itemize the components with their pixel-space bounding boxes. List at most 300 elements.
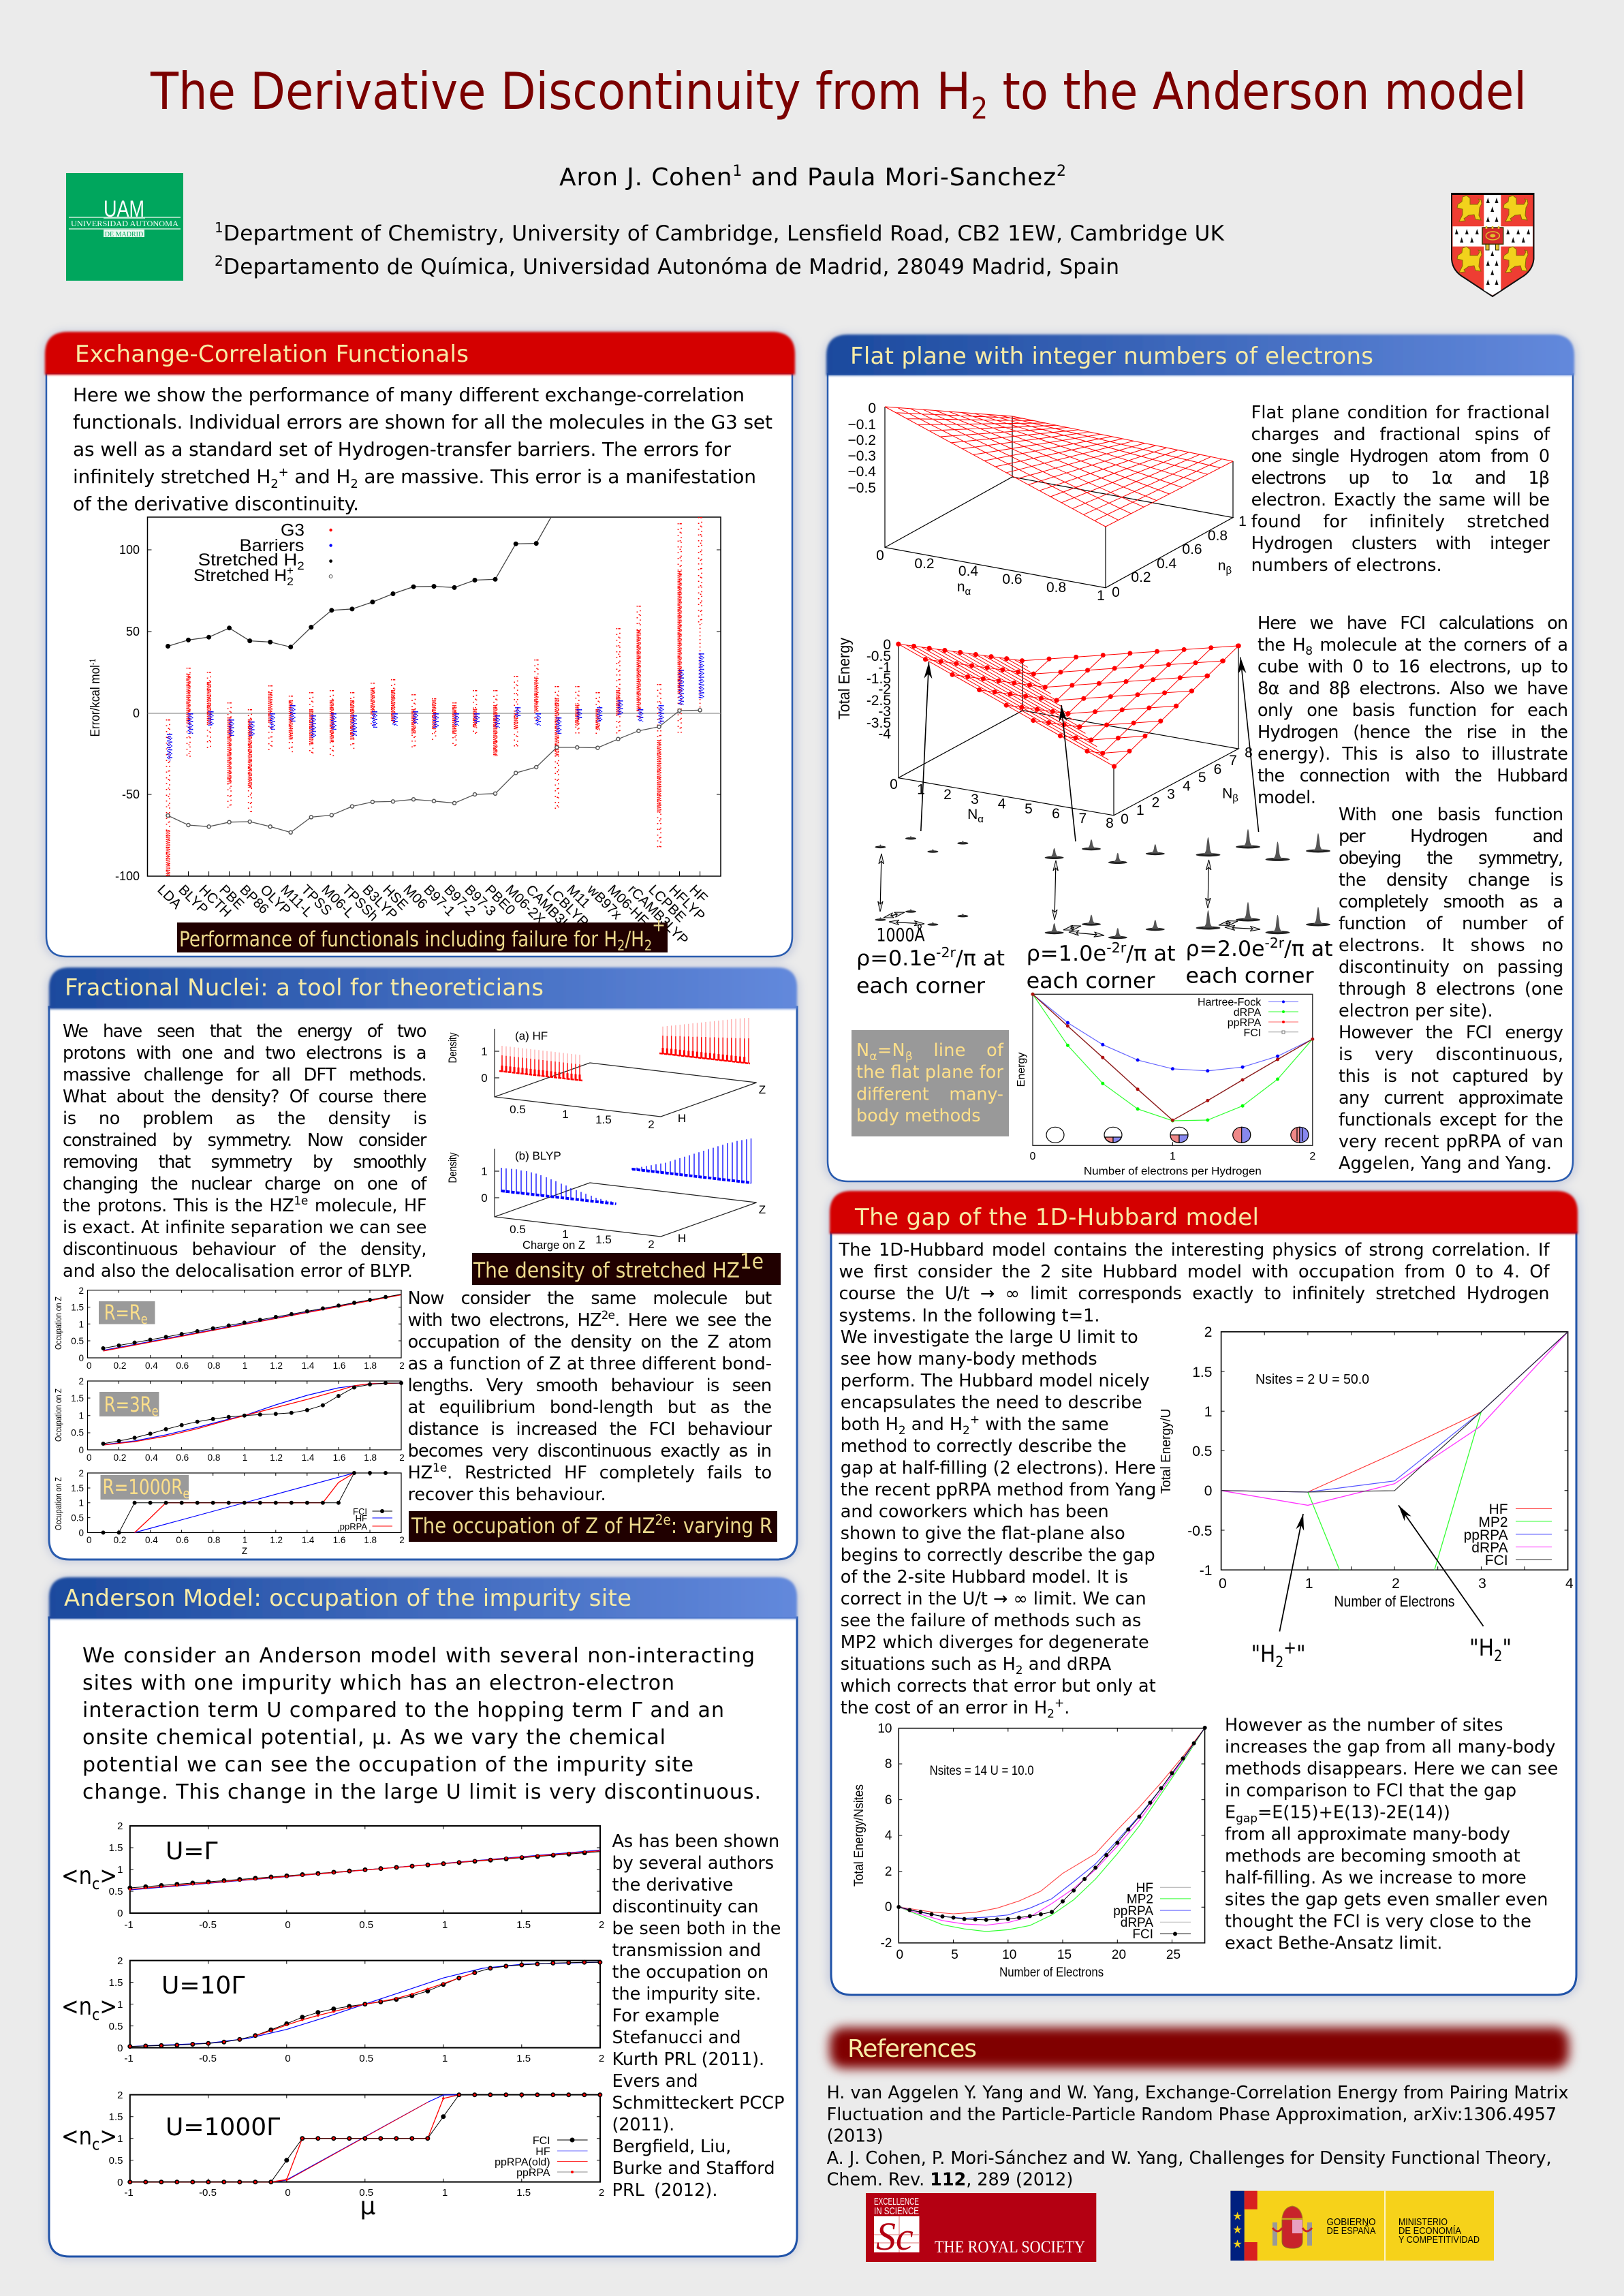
chart: H8 FCI energy plane: 2 [943,787,952,803]
chart: nalpha=nbeta energy curves: 2 [1309,1151,1315,1162]
blue barrier error points [168,653,704,760]
text block: two electrons HZ2e: . Restricted HF completely fails to [447,1463,772,1483]
chart: occupation R=3Re: 0.2 [114,1453,126,1463]
chart: flat plane for one hydrogen: β [1226,565,1232,576]
title: 2 [971,91,988,126]
callout: Na=Nb line: β [905,1050,913,1064]
legend: Nsites=14 chart: MP2 [1127,1893,1153,1906]
chart: occupation R=3Re: 1.4 [302,1453,315,1463]
chart: occupation R=3Re: 1 [243,1453,247,1463]
text block: FCI calculations on H8: the H [1258,635,1306,655]
text block: derivative discontinuity references: Schmitteckert PCCP [612,2093,785,2113]
panel: References [827,2028,1569,2190]
text block: derivative discontinuity references: As has been shown [612,1831,779,1852]
text block: introduction: functionals. Individual errors are shown for all the molecules in the G3 set [73,411,772,433]
text block: FCI calculations on H8: cube with 0 to 16 electrons, up to [1258,657,1568,677]
legend: Nsites=14 chart [1113,1881,1191,1942]
text block: FCI calculations on H8: energy). This is also to illustrate [1258,744,1568,764]
logo: Universidad Autonoma de Madrid: UNIVERSIDAD AUTONOMA [71,219,178,228]
affiliations: Department of Chemistry, University of Cambridge, Lensfield Road, CB2 1EW, Cambridge UK [223,221,1225,246]
diagram: density peaks rho=0.1: 1000Å [876,925,925,946]
chart: U=Gamma: <n [61,1862,97,1890]
chart: occupation R=Re: 0.5 [71,1336,84,1346]
text block: energy and density of two protons: discontinuous behaviour of the density, [63,1239,426,1260]
legend: methods: FCI [1244,1027,1261,1039]
text block: Anderson introduction: potential we can see the occupation of the impurity site [82,1753,693,1777]
chart: occupation R=Re: 0 [87,1361,91,1371]
heading: References [830,2028,1569,2068]
text block: one basis function per hydrogen: functionals except for the [1339,1110,1563,1130]
label: H2+: " [1296,1641,1306,1668]
chart: density BLYP: 0.5 [510,1223,526,1236]
diagram: density peaks rho=0.1 [875,836,968,946]
chart: U=10 Gamma [61,1955,604,2064]
chart legend: 2 [297,559,304,572]
logo: The Royal Society: EXCELLENCE [874,2196,919,2207]
text block: flat plane condition: one single Hydrogen atom from 0 [1251,446,1550,467]
chart: Nsites=2 total energy: 2 [1204,1324,1212,1340]
chart: H8 FCI energy plane: 5 [1025,801,1033,817]
x axis functional names: PBE [216,882,247,913]
text block: Hubbard introduction: systems. In the following t=1. [839,1305,1099,1326]
chart: occupation R=3Re: 0 [78,1445,84,1455]
text block: large U limit: shown to give the flat-plane also [841,1523,1125,1544]
caption: occupation of Z varying R: : varying R [671,1514,772,1538]
legend: Anderson chart: ppRPA [516,2167,550,2179]
chart legend: + [287,564,294,577]
chart: Nsites=2 total energy [1159,1324,1574,1610]
text block: derivative discontinuity references: discontinuity can [612,1897,759,1917]
chart: flat plane for one hydrogen: 0.8 [1208,528,1228,544]
chart: H8 FCI energy plane: 1 [1136,803,1144,818]
x axis functional names: wB97x [584,882,625,923]
text block: large U limit: gap at half-filling (2 electrons). Here [841,1458,1156,1478]
title: to the Anderson model [988,61,1527,121]
authors: 1 [732,163,742,180]
text block: introduction: 2 [350,477,358,491]
heading: Exchange-Correlation Functionals: Exchange-Correlation Functionals [75,341,469,368]
x axis functional names: B97-2 [441,882,478,919]
chart: nalpha=nbeta energy curves: 1 [1170,1151,1176,1162]
y axis labels: 0 [133,707,140,720]
logo: Universidad Autonoma de Madrid [66,173,183,281]
chart legend: Stretched H [198,550,288,570]
chart: U=10 Gamma: 0 [117,2043,123,2054]
y axis labels: 100 [119,543,140,557]
text block: introduction: as well as a standard set of Hydrogen-transfer barriers. The errors for [73,438,731,461]
chart: occupation R=1000Re: 0 [78,1527,84,1538]
text block: derivative discontinuity references: Kurth PRL (2011). [612,2049,764,2070]
chart: U=1000 Gamma: 0.5 [359,2187,373,2199]
legend: Nsites=14 chart: dRPA [1121,1916,1153,1930]
chart: density HF: 0.5 [510,1103,526,1116]
chart: occupation R=Re: 1.4 [302,1361,315,1371]
authors: 2 [1057,163,1066,180]
chart: flat plane for one hydrogen: 0.4 [1157,556,1177,572]
logo: Gobierno de España: ★ [1232,2223,1243,2236]
text block: flat plane condition [1251,403,1550,576]
text block: large U limit: 2 [899,1424,906,1438]
text block: Anderson introduction: We consider an Anderson model with several non-interacting [82,1644,755,1668]
chart: U=1000 Gamma: 1.5 [109,2111,123,2123]
chart: Nsites=2 total energy: 3 [1478,1576,1486,1592]
chart: U=10 Gamma: 2 [599,2053,604,2064]
chart: Nsites=14 total energy: 8 [885,1757,892,1771]
affiliations [215,219,1225,279]
x axis functional names: BP86 [236,882,272,917]
logo: Gobierno de España: ★ [1232,2237,1243,2250]
chart: density BLYP [446,1138,766,1252]
text block: large U limit: MP2 which diverges for degenerate [841,1632,1149,1653]
chart: density BLYP: (b) BLYP [515,1149,561,1162]
text block: many sites gap: E [1225,1803,1236,1823]
caption: performance of functionals [177,914,668,954]
text block: many sites gap: thought the FCI is very close to the [1225,1912,1531,1932]
x axis functional names: PBE0 [482,882,518,918]
chart: flat plane for one hydrogen: 1 [1238,514,1247,529]
label: H2: 2 [1494,1648,1502,1665]
chart: U=10 Gamma: > [99,1993,117,2021]
text block: large U limit: begins to correctly describe the gap [841,1545,1155,1566]
x axis functional names [154,882,710,948]
panel: Flat plane with integer numbers of electrons [824,333,1577,1185]
chart: nalpha=nbeta energy curves: Number of electrons per Hydrogen [1084,1166,1262,1177]
chart legend: 2 [287,575,294,588]
icons: orbital filling circles [1046,1127,1309,1143]
chart: U=Gamma: 1 [117,1864,123,1876]
chart: U=Gamma: c [92,1874,99,1893]
text block: large U limit: see the failure of methods such as [841,1611,1141,1631]
legend: occupation chart: ppRPA [340,1521,367,1532]
arrow: to H2+ kink [1279,1514,1303,1632]
panel: The gap of the 1D-Hubbard model [827,1190,1580,1998]
callout: Na=Nb line: =N [877,1040,905,1061]
text block: energy and density of two protons: and also the delocalisation error of BLYP. [63,1261,413,1282]
chart: H8 FCI energy plane: -3.5 [866,715,891,731]
chart: flat plane for one hydrogen: 0.8 [1046,580,1066,595]
chart: occupation R=Re: 2 [399,1361,405,1371]
text block: many sites gap: increases the gap from all many-body [1225,1737,1556,1758]
text block: one basis function per hydrogen: through 8 electrons (one [1339,979,1563,999]
labels: density formulae: /π at [1126,942,1176,966]
chart: U=Gamma: 1.5 [516,1919,531,1931]
labels: density formulae: ρ=1.0e [1027,942,1104,966]
chart: Nsites=14 total energy: 0 [885,1900,892,1914]
text block: introduction: are massive. This error is a manifestation [358,465,756,488]
chart: nalpha=nbeta energy curves: 0 [1030,1151,1036,1162]
legend: Nsites=2 chart [1464,1502,1552,1568]
text block: two electrons HZ2e: as a function of Z at three different bond- [408,1354,772,1374]
text block: derivative discontinuity references: Bergfield, Liu, [612,2137,731,2157]
text block: energy and density of two protons: 1e [294,1194,308,1208]
chart: density BLYP: 1 [481,1165,488,1178]
text block: derivative discontinuity references: the occupation on [612,1962,768,1983]
text block: two electrons HZ2e: HZ [408,1463,433,1483]
legend: Nsites=14 chart: ppRPA [1113,1904,1153,1919]
chart: U=1000 Gamma: U=1000Γ [166,2113,280,2141]
x axis functional names: M06-HF [604,882,651,929]
text block: reference list: Chem. Rev. 112, 289 (2012) [827,2169,1073,2190]
text block: FCI calculations on H8 [1258,613,1568,808]
text block: large U limit: the recent ppRPA method from Yang [841,1480,1156,1500]
legend: Anderson chart: HF [535,2146,550,2158]
chart: H8 FCI energy plane: -4 [878,726,891,742]
chart: occupation R=3Re: Occupation on Z [53,1389,63,1442]
chart: U=Gamma: 1.5 [109,1842,123,1854]
legend: occupation chart: HF [356,1513,367,1523]
chart: Nsites=2 total energy: 2 [1392,1576,1400,1592]
x axis functional names: B97-1 [420,882,458,919]
chart: U=Gamma: -0.5 [199,1919,217,1931]
label: H2+: 2 [1275,1654,1283,1671]
x axis functional names: HCTH [196,882,234,920]
text block: two electrons HZ2e: 2e [602,1309,615,1322]
chart: occupation R=1000Re: 0.5 [71,1513,84,1523]
text block: derivative discontinuity references: the impurity site. [612,1984,761,2004]
chart: occupation R=Re: 1.5 [71,1303,84,1312]
chart: flat plane for one hydrogen: 0 [1112,585,1120,600]
text block: energy and density of two protons: is exact. At infinite separation we can see [63,1217,426,1238]
chart: occupation R=Re: 0.8 [208,1361,220,1371]
box: R=1000Re: e [183,1485,189,1502]
text block: many sites gap: methods disappears. Here we can see [1225,1759,1558,1780]
chart: H8 FCI energy plane [835,637,1253,831]
chart: Nsites=2 total energy: Total Energy/U [1159,1408,1174,1494]
x axis functional names: TPSSh [339,882,381,924]
chart: H8 FCI energy plane: α [978,813,984,825]
text block: introduction: and H [289,465,350,488]
x axis functional names: HFLYP [666,882,708,924]
text block: Anderson introduction: interaction term U compared to the hopping term Γ and an [82,1698,724,1722]
logo: Gobierno de España: MINISTERIO [1399,2216,1448,2228]
series: stretched H2+ [168,710,700,833]
chart: U=Gamma: > [99,1862,117,1890]
text block: derivative discontinuity references: For example [612,2006,719,2026]
legend: Nsites=2 chart: MP2 [1478,1515,1508,1530]
caption: performance of functionals: Performance of functionals including failure for H [179,927,698,952]
chart: Nsites=14 total energy: 10 [1002,1948,1016,1962]
labels: density formulae: /π at [956,946,1005,971]
caption: density of stretched HZ1e [472,1250,781,1285]
text block: two electrons HZ2e: Now consider the same molecule but [408,1288,772,1309]
text block: energy and density of two protons: protons with one and two electrons is a [63,1043,426,1064]
text block: large U limit: situations such as H [841,1654,1016,1675]
text block: one basis function per hydrogen: per Hydrogen and [1339,826,1563,847]
chart: occupation R=3Re: 0.6 [176,1453,189,1463]
text block: two electrons HZ2e: lengths. Very smooth behaviour is seen [408,1376,772,1396]
text block: large U limit: 2 [1016,1664,1023,1677]
text block: two electrons HZ2e: at equilibrium bond-length but as the [408,1397,772,1418]
text block: reference list [827,2083,1569,2190]
logo: The Royal Society [866,2193,1096,2262]
chart: U=Gamma: 0 [117,1908,123,1919]
chart: density BLYP: H [678,1232,686,1245]
text block: flat plane condition: found for infinitely stretched [1251,512,1550,532]
text block: many sites gap [1225,1716,1558,1954]
text block: derivative discontinuity references: (2011). [612,2115,674,2135]
chart: Nsites=14 total energy: 4 [885,1829,892,1843]
panel: Fractional Nuclei [46,966,800,1563]
authors: Aron J. Cohen [559,164,732,191]
chart: flat plane for one hydrogen: 0.2 [1131,570,1151,585]
legend: methods: Hartree-Fock [1198,997,1262,1008]
chart: flat plane for one hydrogen: −0.5 [848,480,876,496]
caption: density of stretched HZ1e: The density of stretched HZ [473,1258,768,1283]
text block: two electrons HZ2e: recover this behaviour. [408,1485,606,1505]
chart: H8 FCI energy plane: -3 [878,704,891,719]
callout: Na=Nb line: the flat plane for [856,1062,1004,1083]
chart: occupation R=1000Re: Occupation on Z [53,1477,63,1530]
text block: energy and density of two protons: We have seen that the energy of two [63,1021,426,1042]
chart: occupation R=1000Re: 1 [78,1498,84,1508]
text block: derivative discontinuity references: PRL (2012). [612,2180,718,2201]
text block: flat plane condition: charges and fractional spins of [1251,424,1550,445]
chart: U=1000 Gamma: 0 [117,2177,123,2188]
text block: two electrons HZ2e: becomes very discontinuous exactly as in [408,1441,772,1461]
text block: one basis function per hydrogen: is very discontinuous, [1339,1044,1563,1065]
chart: U=1000 Gamma: μ [360,2192,376,2220]
text block: large U limit: and H [906,1414,963,1435]
text block: large U limit: both H [841,1414,899,1435]
text block: introduction [73,384,772,515]
legend: Nsites=2 chart: FCI [1485,1553,1508,1568]
chart: occupation R=3Re: 1.2 [270,1453,283,1463]
chart: U=10 Gamma: -0.5 [199,2053,217,2064]
logo: The Royal Society: THE ROYAL SOCIETY [935,2238,1085,2256]
arrow: high density corner to plane [1240,657,1259,832]
chart: occupation R=3Re: 1.8 [364,1453,377,1463]
heading: Fractional Nuclei [49,967,797,1009]
logo: The Royal Society: Sc [876,2214,914,2259]
chart: Nsites=2 total energy: 1 [1305,1576,1313,1592]
chart: density BLYP: Charge on Z [522,1239,585,1252]
chart: flat plane for one hydrogen: 0 [876,548,884,563]
chart: density HF: 1 [481,1045,488,1058]
arrow: medium density corner to plane [1061,705,1076,841]
chart: flat plane for one hydrogen [848,401,1247,604]
chart: occupation R=3Re: 2 [399,1453,405,1463]
callout: Na=Nb line: body methods [856,1106,981,1126]
chart: occupation R=Re: 0.6 [176,1361,189,1371]
text block: energy and density of two protons [63,1021,428,1282]
text block: many sites gap: from all approximate many-body [1225,1825,1510,1845]
chart legend: G3 [281,521,304,540]
label: H2: " [1502,1634,1512,1662]
chart: U=1000 Gamma: 1 [117,2133,123,2145]
text block: introduction: 2 [270,477,279,491]
text block: flat plane condition: electrons up to 1α and 1β [1251,468,1550,488]
heading: Hubbard gap: The gap of the 1D-Hubbard model [854,1204,1259,1231]
labels: density formulae: each corner [1027,969,1155,993]
text block: one basis function per hydrogen: any current approximate [1339,1088,1563,1108]
chart: density BLYP: Z [759,1203,766,1216]
chart: occupation R=1000Re: 1.6 [333,1535,345,1545]
text block: one basis function per hydrogen [1339,805,1564,1174]
chart: occupation R=1000Re [53,1468,405,1556]
y axis labels: -1 [88,658,97,665]
chart: U=10 Gamma: 0.5 [359,2053,373,2064]
legend: occupation chart [340,1506,392,1532]
chart: Nsites=2 total energy: 4 [1565,1576,1574,1592]
chart: Nsites=14 total energy: Number of Electrons [999,1966,1104,1980]
chart: occupation R=1000Re: 0.8 [208,1535,220,1545]
chart: U=1000 Gamma: 1 [442,2187,448,2199]
text block: many sites gap: in comparison to FCI that the gap [1225,1781,1516,1801]
chart: U=1000 Gamma [61,2090,604,2220]
chart: occupation R=Re: 2 [78,1286,84,1296]
text block: flat plane condition: numbers of electrons. [1251,555,1442,576]
chart: H8 FCI energy plane: 7 [1079,811,1087,826]
text block: two electrons HZ2e: with two electrons, HZ [408,1310,602,1331]
caption: occupation of Z varying R: The occupation of Z of HZ [411,1514,686,1538]
y axis labels: -100 [115,869,140,883]
labels: density formulae: -2r [1106,940,1127,956]
chart: occupation R=Re: 1.8 [364,1361,377,1371]
text block: large U limit: We investigate the large U limit to [841,1327,1138,1348]
chart: flat plane for one hydrogen: α [965,586,971,598]
chart: occupation R=1000Re: 0.2 [114,1535,126,1545]
chart: density HF: (a) HF [515,1029,548,1042]
chart: Nsites=2 total energy: 1 [1204,1404,1212,1420]
chart: H8 FCI energy plane: -1.5 [866,671,891,687]
chart: H8 FCI energy plane: -1 [878,660,891,676]
chart: H8 FCI energy plane: 3 [971,792,979,807]
text block: reference list: (2013) [827,2126,884,2147]
chart: flat plane for one hydrogen: 1 [1097,588,1105,604]
chart: U=10 Gamma: 1.5 [109,1977,123,1989]
text block: derivative discontinuity references: Stefanucci and [612,2028,741,2048]
chart: H8 FCI energy plane: 4 [1183,778,1191,794]
chart: H8 FCI energy plane: 0 [1121,811,1129,827]
chart: H8 FCI energy plane: 0 [883,637,891,653]
chart: nalpha=nbeta energy curves: Energy [1016,1053,1027,1087]
x axis functional names: B97-3 [461,882,499,919]
legend: methods: dRPA [1234,1007,1262,1019]
logo: Cambridge shield [1451,193,1534,296]
text block: large U limit: perform. The Hubbard model nicely [841,1371,1150,1391]
x axis functional names: rCAMB3LYP [625,882,691,948]
heading: Flat plane [826,335,1574,375]
chart: flat plane for one hydrogen: −0.4 [848,464,876,480]
chart: occupation R=Re: 1.2 [270,1361,283,1371]
text block: Anderson introduction: onsite chemical potential, μ. As we vary the chemical [82,1726,666,1750]
chart: U=1000 Gamma: <n [61,2123,97,2150]
diagram: density peaks rho=2.0 [1196,829,1330,934]
chart: H8 FCI energy plane: N [1222,786,1232,802]
chart: density HF: H [678,1112,686,1125]
legend: methods: ppRPA [1228,1017,1262,1029]
chart: Nsites=14 total energy: 2 [885,1865,892,1879]
text block: derivative discontinuity references: be seen both in the [612,1919,781,1939]
caption: performance of functionals: 2 [644,937,652,954]
chart: occupation R=Re: 1 [78,1319,84,1329]
chart legend: Barriers [240,536,304,555]
x axis functional names: HF [686,882,710,906]
text block: one basis function per hydrogen: electron per site). [1339,1001,1493,1021]
red G3 error points [166,517,702,876]
arrow: low density corner to plane [921,662,929,831]
text block: Hubbard introduction: we first consider the 2 site Hubbard model with occupation from 0 to 4. Of [839,1262,1550,1282]
caption: density of stretched HZ1e: 1e [740,1250,764,1274]
chart: density HF [446,1018,766,1131]
chart: H8 FCI energy plane: 8 [1245,745,1253,760]
x axis functional names: M06-L [318,882,358,921]
text block: one basis function per hydrogen: Aggelen, Yang and Yang. [1339,1153,1552,1174]
y axis labels: 50 [126,625,140,638]
text block: derivative discontinuity references: Evers and [612,2071,698,2092]
chart: flat plane for one hydrogen: n [1218,558,1226,574]
chart: flat plane for one hydrogen: 0.6 [1182,542,1202,557]
